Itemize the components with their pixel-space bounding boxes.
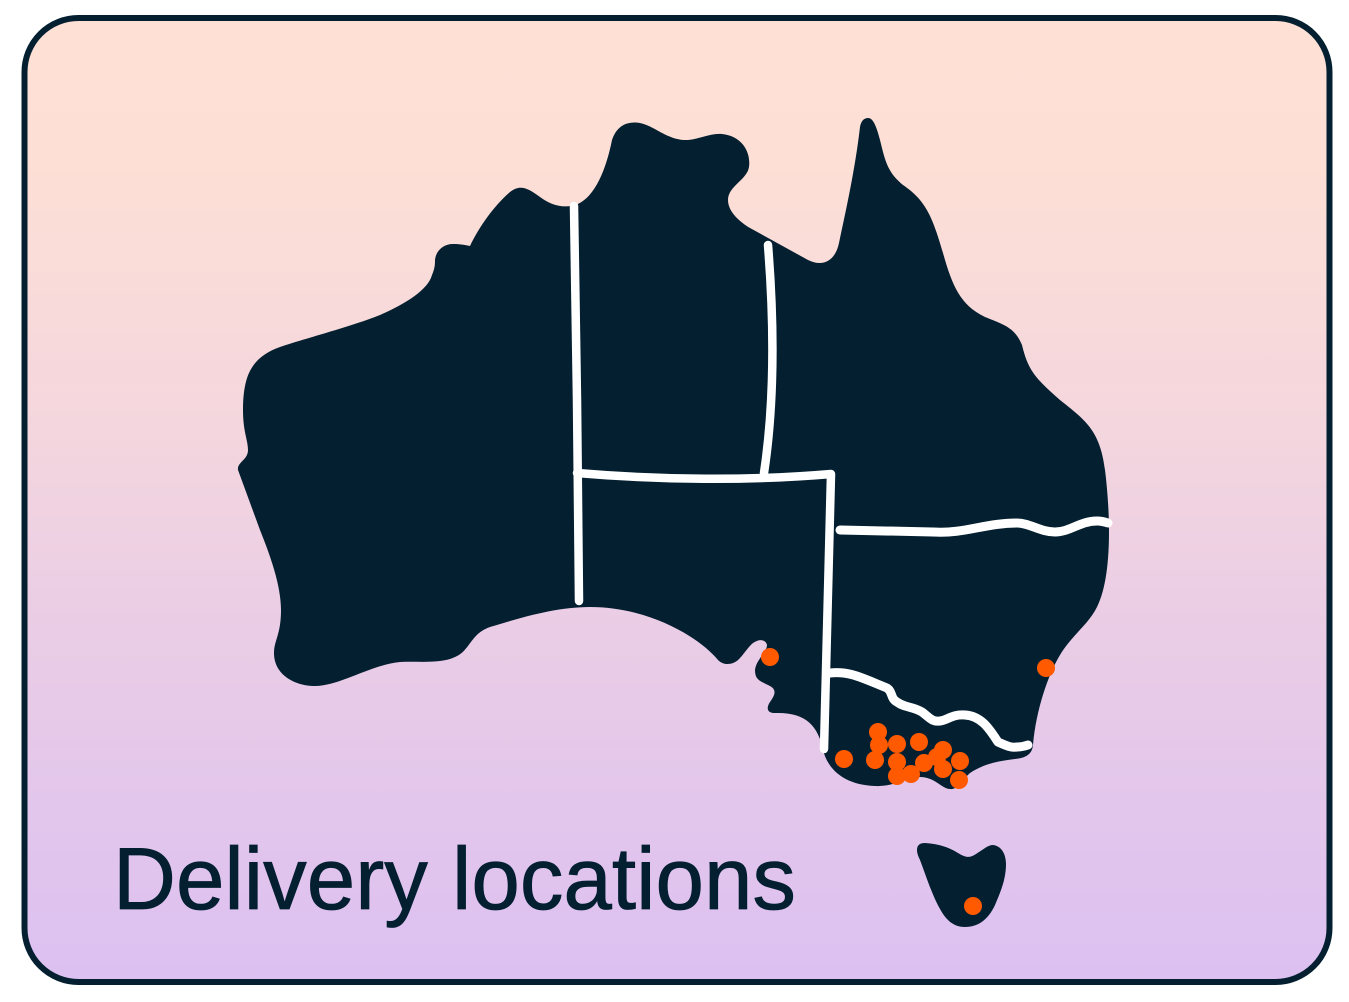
state borders — [574, 206, 1108, 749]
map: Australia mainland with state borders — [238, 118, 1109, 789]
landmass: mainland Australia — [238, 118, 1109, 789]
border: WA / NT and SA — [574, 206, 579, 601]
border: NSW / VIC — [830, 673, 1028, 747]
delivery location markers — [761, 648, 1055, 915]
title: Delivery locations — [113, 829, 796, 928]
border: NT / QLD — [764, 245, 772, 473]
landmass: Tasmania — [917, 843, 1006, 927]
border: SA north and NSW west — [577, 473, 831, 749]
border: QLD / NSW — [840, 521, 1108, 532]
